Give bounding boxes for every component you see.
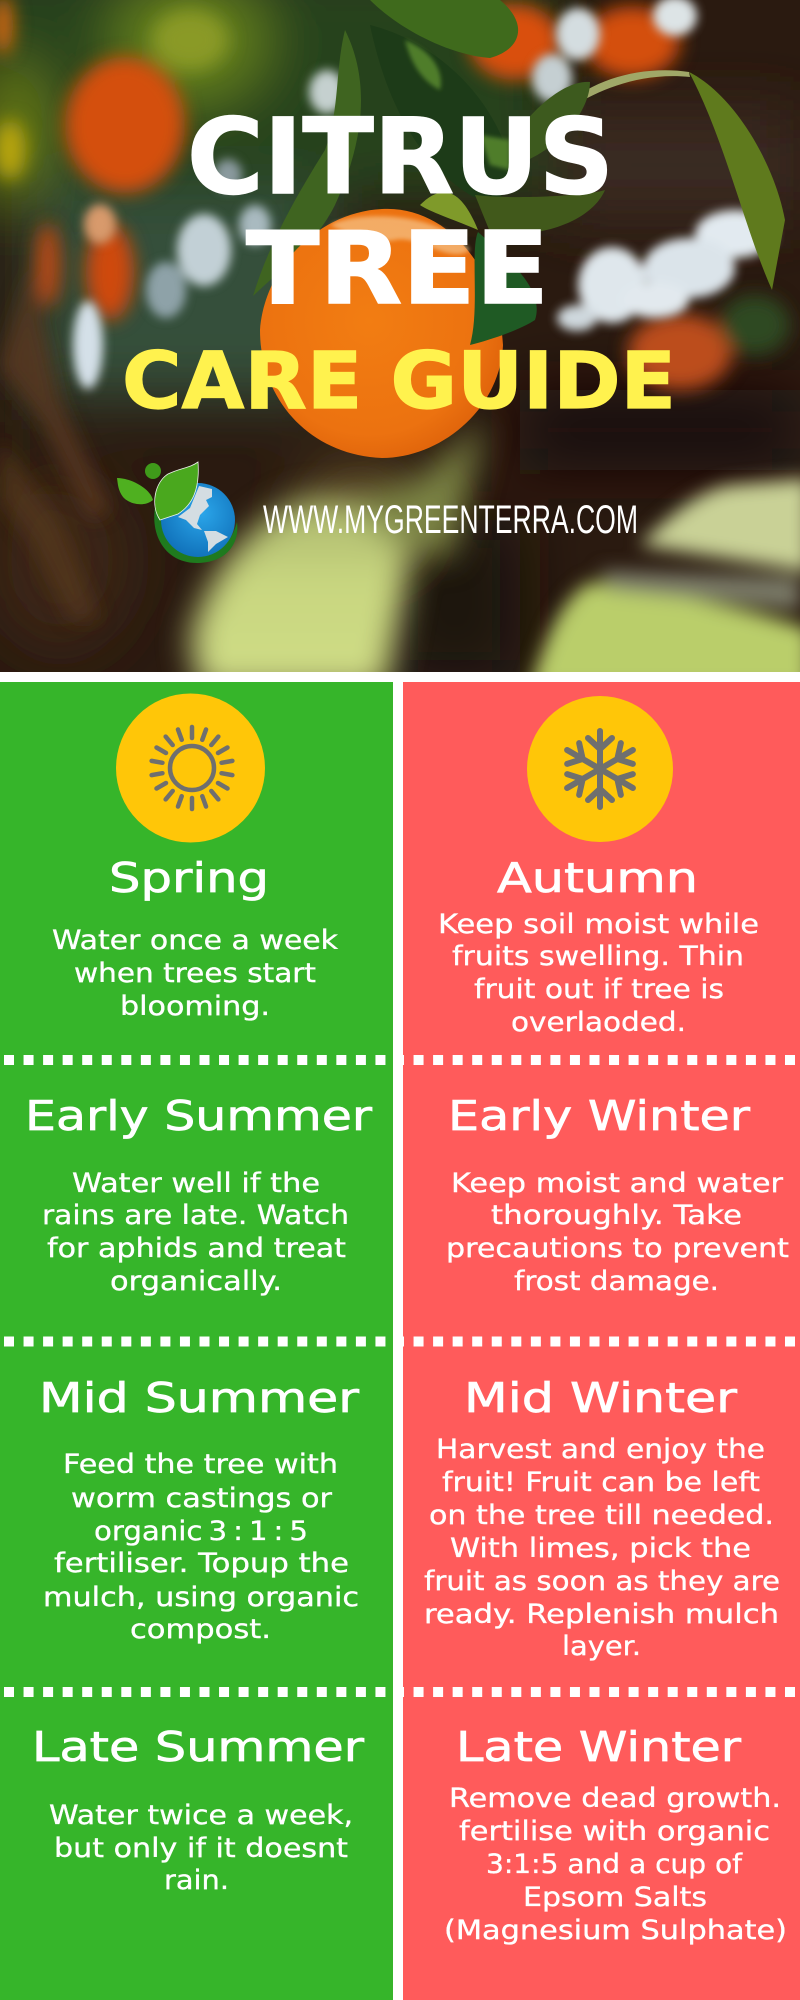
text: mid winter care: Harvest and enjoy the [436,1434,765,1465]
crescent ring [154,490,237,563]
cloud-like light through canopy [695,210,775,258]
section: mid winter [424,1374,780,1662]
text: late winter care [444,1783,787,1946]
text: late summer care: rain. [164,1865,229,1896]
title: citrus tree [187,96,614,327]
heading: mid summer: Mid Summer [39,1374,359,1422]
divider: row two [4,1336,800,1346]
logo: globe with leaves [117,462,237,563]
central orange fruit [260,209,503,458]
text: early summer care: organically. [110,1266,282,1297]
section: early summer [25,1092,372,1297]
heading: late winter: Late Winter [456,1723,741,1771]
text: spring care: Water once a week [52,925,338,956]
section: autumn [438,854,759,1038]
text: autumn care [438,909,759,1038]
text: late winter care: 3:1:5 and a cup of [486,1849,744,1880]
globe [161,483,235,557]
leaf highlights [405,40,510,170]
panel: winter column [403,682,800,2000]
text: mid summer care: organic 3 : 1 : 5 [94,1516,308,1547]
text: mid summer care [43,1449,359,1645]
heading: autumn: Autumn [497,854,698,902]
heading: mid winter: Mid Winter [464,1374,737,1422]
text: early summer care: rains are late. Watch [42,1200,349,1231]
text: mid winter care: With limes, pick the [450,1533,751,1564]
large leaf [155,462,198,520]
section: early winter [446,1092,789,1297]
text: mid summer care: worm castings or [71,1483,333,1514]
orange highlights [330,216,470,254]
text: late summer care: Water twice a week, [49,1800,353,1831]
subtitle: care guide: CARE GUIDE [122,337,676,427]
text: late summer care [49,1800,353,1896]
text: early winter care: precautions to prevent [446,1233,789,1264]
heading: spring: Spring [109,854,269,902]
text: mid winter care [424,1434,780,1662]
bud [145,463,161,479]
heading: early summer: Early Summer [25,1092,372,1140]
divider: row three [4,1687,800,1697]
text: early winter care: frost damage. [514,1266,719,1297]
heading: early winter: Early Winter [448,1092,750,1140]
text: mid winter care: on the tree till needed. [429,1500,774,1531]
section: spring [52,854,338,1022]
text: mid winter care: fruit as soon as they are [424,1566,780,1597]
text: late winter care: (Magnesium Sulphate) [444,1915,787,1946]
text: late summer care: but only if it doesnt [54,1833,348,1864]
text: spring care [52,925,338,1022]
leaf: right [689,72,785,290]
text: mid summer care: fertiliser. Topup the [54,1548,349,1579]
text: mid summer care: mulch, using organic [43,1582,359,1613]
heading: late summer: Late Summer [32,1723,364,1771]
text: early winter care [446,1168,789,1297]
title line: tree: TREE [246,210,549,327]
section: late winter [444,1723,787,1946]
text: mid summer care: Feed the tree with [63,1449,338,1480]
text: mid summer care: compost. [130,1614,271,1645]
divider: row one [4,1055,800,1065]
text: autumn care: Keep soil moist while [438,909,759,940]
section: late summer [32,1723,364,1896]
leaf: upper right [530,82,590,159]
leaf: on top of orange [420,192,478,230]
leaf: under title [475,190,605,234]
icon: sun [116,694,265,842]
text: late winter care: Remove dead growth. [449,1783,781,1814]
hero photo: orange tree [0,0,800,690]
text: spring care: when trees start [74,958,316,989]
text: mid winter care: ready. Replenish mulch [424,1599,779,1630]
leaf: long left [253,30,361,296]
text: mid winter care: fruit! Fruit can be left [442,1467,760,1498]
text: late winter care: fertilise with organic [459,1816,770,1847]
leaf: right of orange [470,232,537,345]
text: early winter care: Keep moist and water [451,1168,784,1199]
text: early summer care [42,1168,349,1297]
small leaf [117,478,153,504]
text: late winter care: Epsom Salts [523,1882,707,1913]
leaf: top [370,0,518,58]
text: mid winter care: layer. [562,1631,641,1662]
stem: upper right [587,70,690,98]
text: early winter care: thoroughly. Take [491,1200,742,1231]
icon: snowflake [527,696,673,842]
leaf: dark centre [370,25,511,200]
text: autumn care: overlaoded. [511,1007,686,1038]
text: early summer care: Water well if the [72,1168,320,1199]
continents [178,486,228,552]
title line: citrus: CITRUS [187,96,614,218]
text: autumn care: fruit out if tree is [474,974,724,1005]
panel: summer column [0,682,393,2000]
text: autumn care: fruits swelling. Thin [452,941,744,972]
section: mid summer [39,1374,359,1645]
text: early summer care: for aphids and treat [47,1233,346,1264]
text: spring care: blooming. [120,991,270,1022]
